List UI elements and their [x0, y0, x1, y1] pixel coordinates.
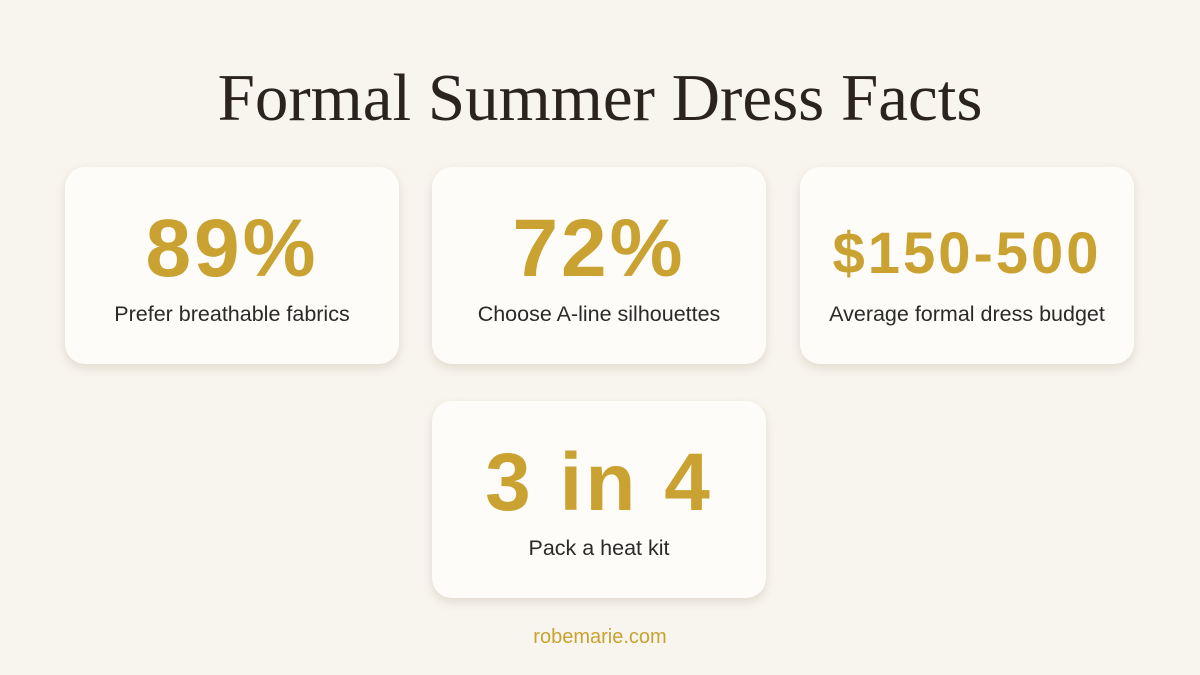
stat label: Average formal dress budget — [829, 302, 1105, 326]
title: Formal Summer Dress Facts — [218, 61, 982, 135]
card: heat kit — [432, 401, 766, 598]
card: budget — [800, 167, 1134, 364]
stat label: Pack a heat kit — [528, 536, 670, 560]
card: A-line — [432, 167, 766, 364]
card: breathable fabrics — [65, 167, 399, 364]
stat number: 89% — [145, 203, 319, 294]
stat number: 72% — [512, 203, 686, 294]
footer: robemarie.com — [533, 626, 667, 648]
stat number: $150-500 — [832, 221, 1102, 286]
stat label: Choose A-line silhouettes — [478, 302, 720, 326]
stat label: Prefer breathable fabrics — [114, 302, 350, 326]
stat number: 3 in 4 — [485, 437, 713, 528]
